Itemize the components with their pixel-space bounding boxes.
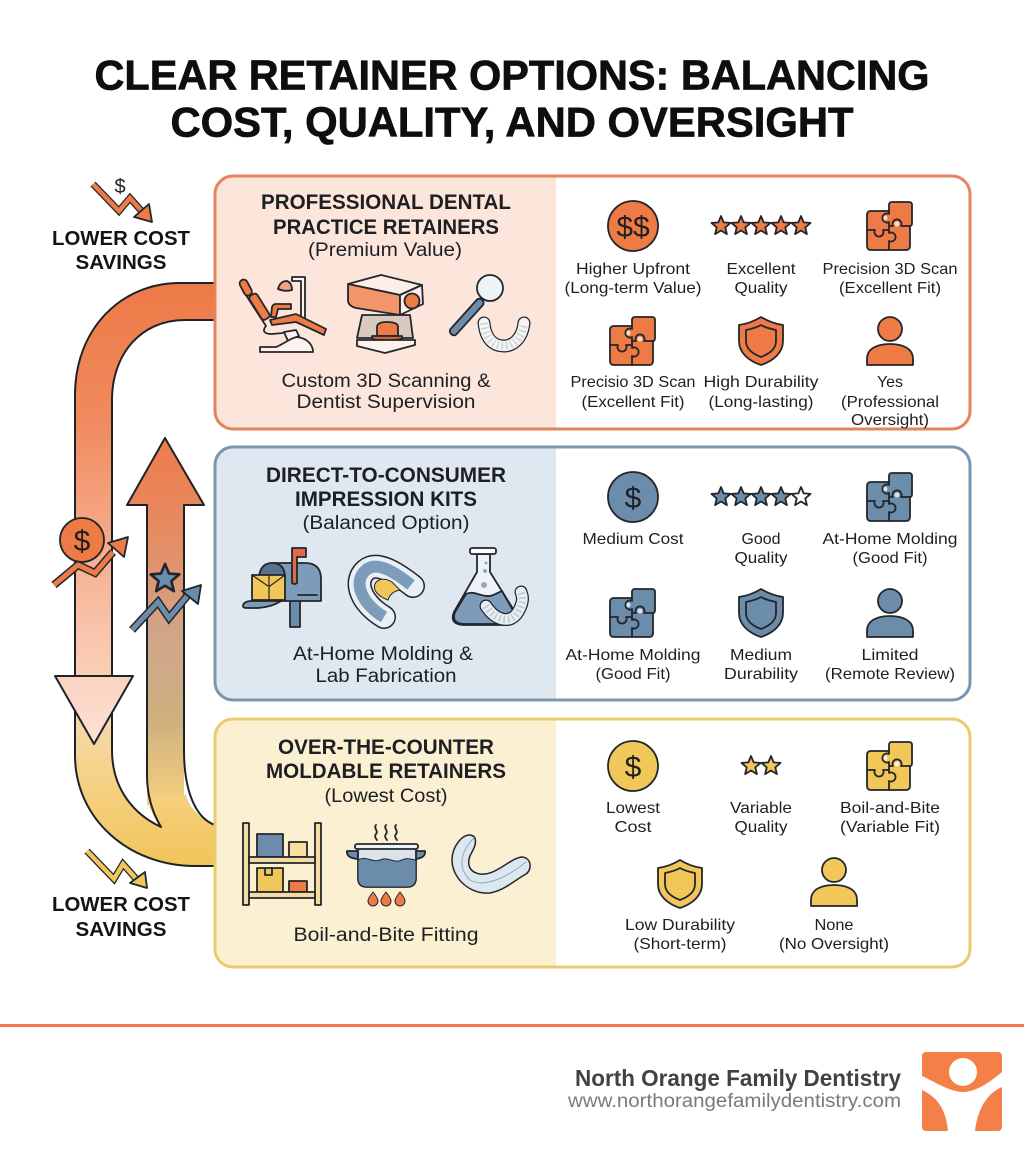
footer brand text (567, 1065, 901, 1112)
fit: precision 3D scan (822, 202, 958, 297)
label: lower cost savings top (52, 228, 190, 274)
retainer (484, 323, 524, 346)
heading (266, 464, 506, 534)
oversight: none: (No Oversight) (779, 936, 889, 953)
heading: (Balanced Option) (302, 513, 470, 534)
panel: direct-to-consumer impression kits (215, 447, 970, 700)
quality: excellent: Quality (734, 280, 788, 297)
heading: IMPRESSION KITS (295, 488, 477, 511)
label: lower cost savings bottom: SAVINGS (76, 919, 166, 941)
cost: higher upfront: (Long-term Value) (564, 280, 702, 297)
handle (448, 297, 485, 337)
durability: low: Low Durability (625, 917, 735, 934)
cost: medium: Medium Cost (582, 531, 684, 548)
caption: At-Home Molding & (293, 644, 473, 665)
fit: precisio 3D scan (570, 317, 696, 411)
lens (477, 275, 503, 301)
icon: coin with rising arrow (54, 518, 128, 585)
icon: lower cost arrow top (93, 176, 152, 222)
caption (282, 371, 491, 413)
icon: lab flask with retainer (453, 548, 522, 625)
oversight: limited (825, 589, 955, 683)
footer brand text: North Orange Family Dentistry (575, 1065, 901, 1091)
icon: impression tray (360, 567, 413, 617)
label: lower cost savings bottom (52, 894, 190, 941)
label: lower cost savings top: SAVINGS (76, 252, 166, 274)
panel: professional dental practice retainers (215, 176, 970, 429)
heading: OVER-THE-COUNTER (278, 736, 494, 759)
durability: medium (724, 589, 798, 683)
cost: higher upfront: Higher Upfront (576, 261, 691, 278)
icon: moldable retainer (452, 835, 530, 893)
footer brand text: www.northorangefamilydentistry.com (567, 1091, 901, 1112)
fit: at-home molding: (Good Fit) (852, 550, 928, 567)
fit: boil-and-bite: (Variable Fit) (840, 819, 940, 836)
fit: precisio 3D scan: (Excellent Fit) (582, 394, 684, 411)
oversight: limited: (Remote Review) (825, 666, 955, 683)
oversight: none (779, 858, 889, 953)
panel: over-the-counter moldable retainers (215, 719, 970, 967)
oversight: yes (841, 317, 939, 429)
caption (293, 644, 473, 687)
durability: high: High Durability (704, 374, 818, 391)
durability: medium: Medium (730, 647, 792, 664)
quality: good: Quality (734, 550, 788, 567)
icon: boiling pot (347, 825, 425, 906)
quality: variable: Variable (730, 800, 792, 817)
caption: Dentist Supervision (296, 392, 476, 413)
oversight: limited: Limited (862, 647, 918, 664)
title (94, 52, 930, 146)
quality: excellent (711, 216, 811, 297)
icon: lower cost arrow top: $ (114, 176, 126, 198)
cost: lowest (606, 741, 661, 836)
icon: mailbox with package (243, 548, 321, 627)
title: CLEAR RETAINER OPTIONS: BALANCING (94, 52, 930, 98)
heading (266, 736, 506, 807)
durability: low (625, 860, 735, 953)
cost: lowest: Lowest (606, 800, 661, 817)
heading: (Premium Value) (308, 240, 462, 261)
icon: coin with rising arrow: $ (74, 525, 91, 558)
title: COST, QUALITY, AND OVERSIGHT (170, 98, 854, 146)
fit: at-home molding repeat: At-Home Molding (566, 647, 700, 664)
caption: Custom 3D Scanning & (282, 371, 491, 392)
icon: magnifier and retainer (448, 275, 524, 346)
durability: high: (Long-lasting) (708, 394, 814, 411)
cost: lowest: Cost (614, 819, 652, 836)
durability: high (704, 317, 818, 411)
fit: precision 3D scan: Precision 3D Scan (822, 261, 958, 278)
lip (470, 548, 496, 554)
oversight: yes: (Professional (841, 394, 939, 411)
fit: at-home molding repeat: (Good Fit) (596, 666, 670, 683)
icon: 3D scanner (348, 275, 423, 353)
cost: higher upfront: $$ (616, 211, 650, 244)
liquid (454, 591, 515, 624)
fit: precisio 3D scan: Precisio 3D Scan (570, 374, 696, 391)
quality: good (711, 487, 811, 567)
heading: PRACTICE RETAINERS (273, 216, 499, 239)
fit: at-home molding: At-Home Molding (822, 531, 958, 548)
heading: PROFESSIONAL DENTAL (261, 191, 511, 214)
caption: Lab Fabrication (316, 666, 456, 687)
oversight: yes: Yes (877, 374, 903, 391)
cost: medium: $ (625, 482, 642, 515)
heading (261, 191, 511, 261)
flow arrows: cost and quality bands (55, 283, 215, 866)
retainer (486, 592, 522, 620)
cost: medium (582, 472, 684, 548)
heading: (Lowest Cost) (324, 786, 448, 807)
icon: dental chair (238, 277, 326, 352)
flask (453, 554, 516, 625)
label: lower cost savings top: LOWER COST (52, 228, 190, 250)
heading: MOLDABLE RETAINERS (266, 760, 506, 783)
cost: lowest: $ (625, 751, 642, 784)
durability: low: (Short-term) (634, 936, 726, 953)
caption: Boil-and-Bite Fitting (294, 925, 478, 946)
oversight: yes: Oversight) (851, 412, 929, 429)
cost: higher upfront (564, 201, 702, 297)
fit: boil-and-bite (840, 742, 940, 836)
icon: lower cost arrow bottom (87, 851, 147, 888)
fit: boil-and-bite: Boil-and-Bite (840, 800, 940, 817)
quality: variable (730, 756, 792, 836)
icon: store shelf (243, 823, 321, 905)
quality: variable: Quality (734, 819, 788, 836)
logo (922, 1052, 1002, 1131)
fit: at-home molding repeat (566, 589, 700, 683)
fit: at-home molding (822, 473, 958, 567)
durability: medium: Durability (724, 666, 798, 683)
label: lower cost savings bottom: LOWER COST (52, 894, 190, 916)
fit: precision 3D scan: (Excellent Fit) (839, 280, 941, 297)
icon: star with rising arrow (132, 564, 201, 630)
heading: DIRECT-TO-CONSUMER (266, 464, 506, 487)
oversight: none: None (814, 917, 854, 934)
quality: good: Good (742, 531, 780, 548)
quality: excellent: Excellent (726, 261, 796, 278)
